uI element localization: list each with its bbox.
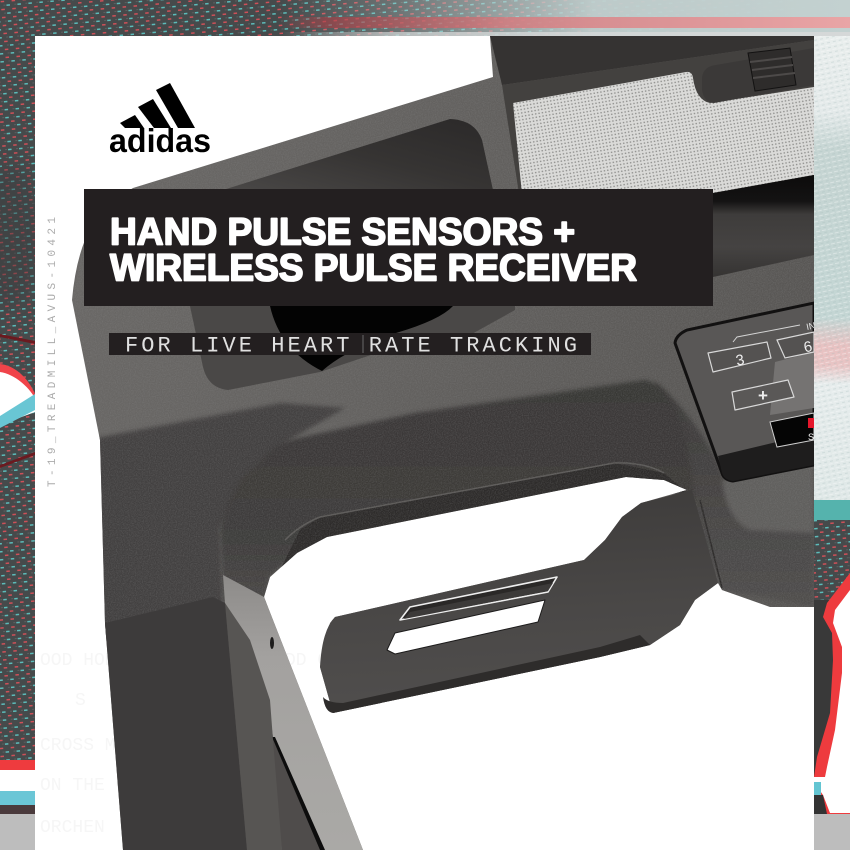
button 6: 6 [802, 338, 814, 356]
left column bottom stripes [0, 760, 35, 814]
faint ghost text on panel: DD C [285, 651, 328, 671]
dark lower-left body [96, 403, 345, 640]
incline bracket [733, 325, 800, 342]
textured side strip [225, 603, 282, 850]
recess above title [223, 119, 493, 190]
cup holder opening [270, 306, 453, 371]
vertical code label: T-19_TREADMILL_AVUS-10421 [47, 217, 59, 487]
body shading [74, 50, 814, 712]
knob housing [702, 48, 814, 103]
body grain overlay [74, 50, 814, 622]
button 3: 3 [734, 351, 746, 370]
seam on neck [700, 500, 722, 588]
opening lip highlight [285, 463, 664, 540]
stop button: S [808, 432, 814, 442]
faint ghost text on panel: ON THE CR [40, 776, 137, 796]
lighter shelf under display [722, 462, 814, 533]
light metal strut [223, 575, 363, 850]
translucent label reflection [770, 352, 814, 415]
brand logo [109, 83, 211, 159]
faint ghost text on panel: ORCHEN [40, 818, 105, 838]
top band fade [280, 0, 850, 36]
inner dark panel [273, 740, 320, 850]
top console cap [490, 36, 814, 85]
hand grip [320, 490, 718, 713]
right column white shape with red outline [814, 573, 850, 850]
faint ghost text on panel: S [75, 691, 86, 711]
rim around speaker [502, 40, 814, 191]
button plus: + [758, 386, 768, 405]
button plus [732, 380, 794, 410]
opening lip shadow [280, 463, 690, 570]
subtitle block: FOR LIVE HEART RATE TRACKING [125, 334, 577, 358]
speaker mesh [513, 72, 814, 193]
faint ghost text on panel: OOD HOR [40, 651, 116, 671]
stop button [770, 413, 814, 447]
lower pulse sensor [387, 600, 545, 654]
leg column [105, 575, 363, 850]
incline label: IN [805, 320, 816, 332]
button 6 [777, 332, 814, 358]
right column light texture [814, 36, 850, 590]
button 3 [708, 342, 771, 372]
black strut edge [272, 737, 325, 850]
front dark panel [105, 597, 247, 850]
faint ghost text on panel: CROSS M [40, 736, 116, 756]
dark band below mesh [713, 175, 814, 277]
strut bolt hole [270, 637, 274, 649]
display panel [675, 303, 816, 481]
moire ring shading [0, 165, 40, 305]
neck beside display [655, 382, 814, 607]
upper pulse sensor [400, 577, 557, 620]
title text: HAND PULSE SENSORS + [110, 212, 575, 254]
grip lower lip [323, 635, 650, 713]
faint ghost text on panel [40, 651, 328, 838]
cup holder recess [190, 119, 515, 390]
bottom grey strip [0, 814, 850, 850]
logo stripes [120, 83, 195, 128]
logo wordmark: adidas [109, 122, 211, 159]
left column glitch blob [0, 334, 35, 468]
darker rim band around opening [220, 380, 695, 610]
title text [110, 212, 637, 290]
title text: WIRELESS PULSE RECEIVER [110, 248, 637, 290]
recess below title [190, 306, 515, 390]
title block [84, 189, 713, 306]
